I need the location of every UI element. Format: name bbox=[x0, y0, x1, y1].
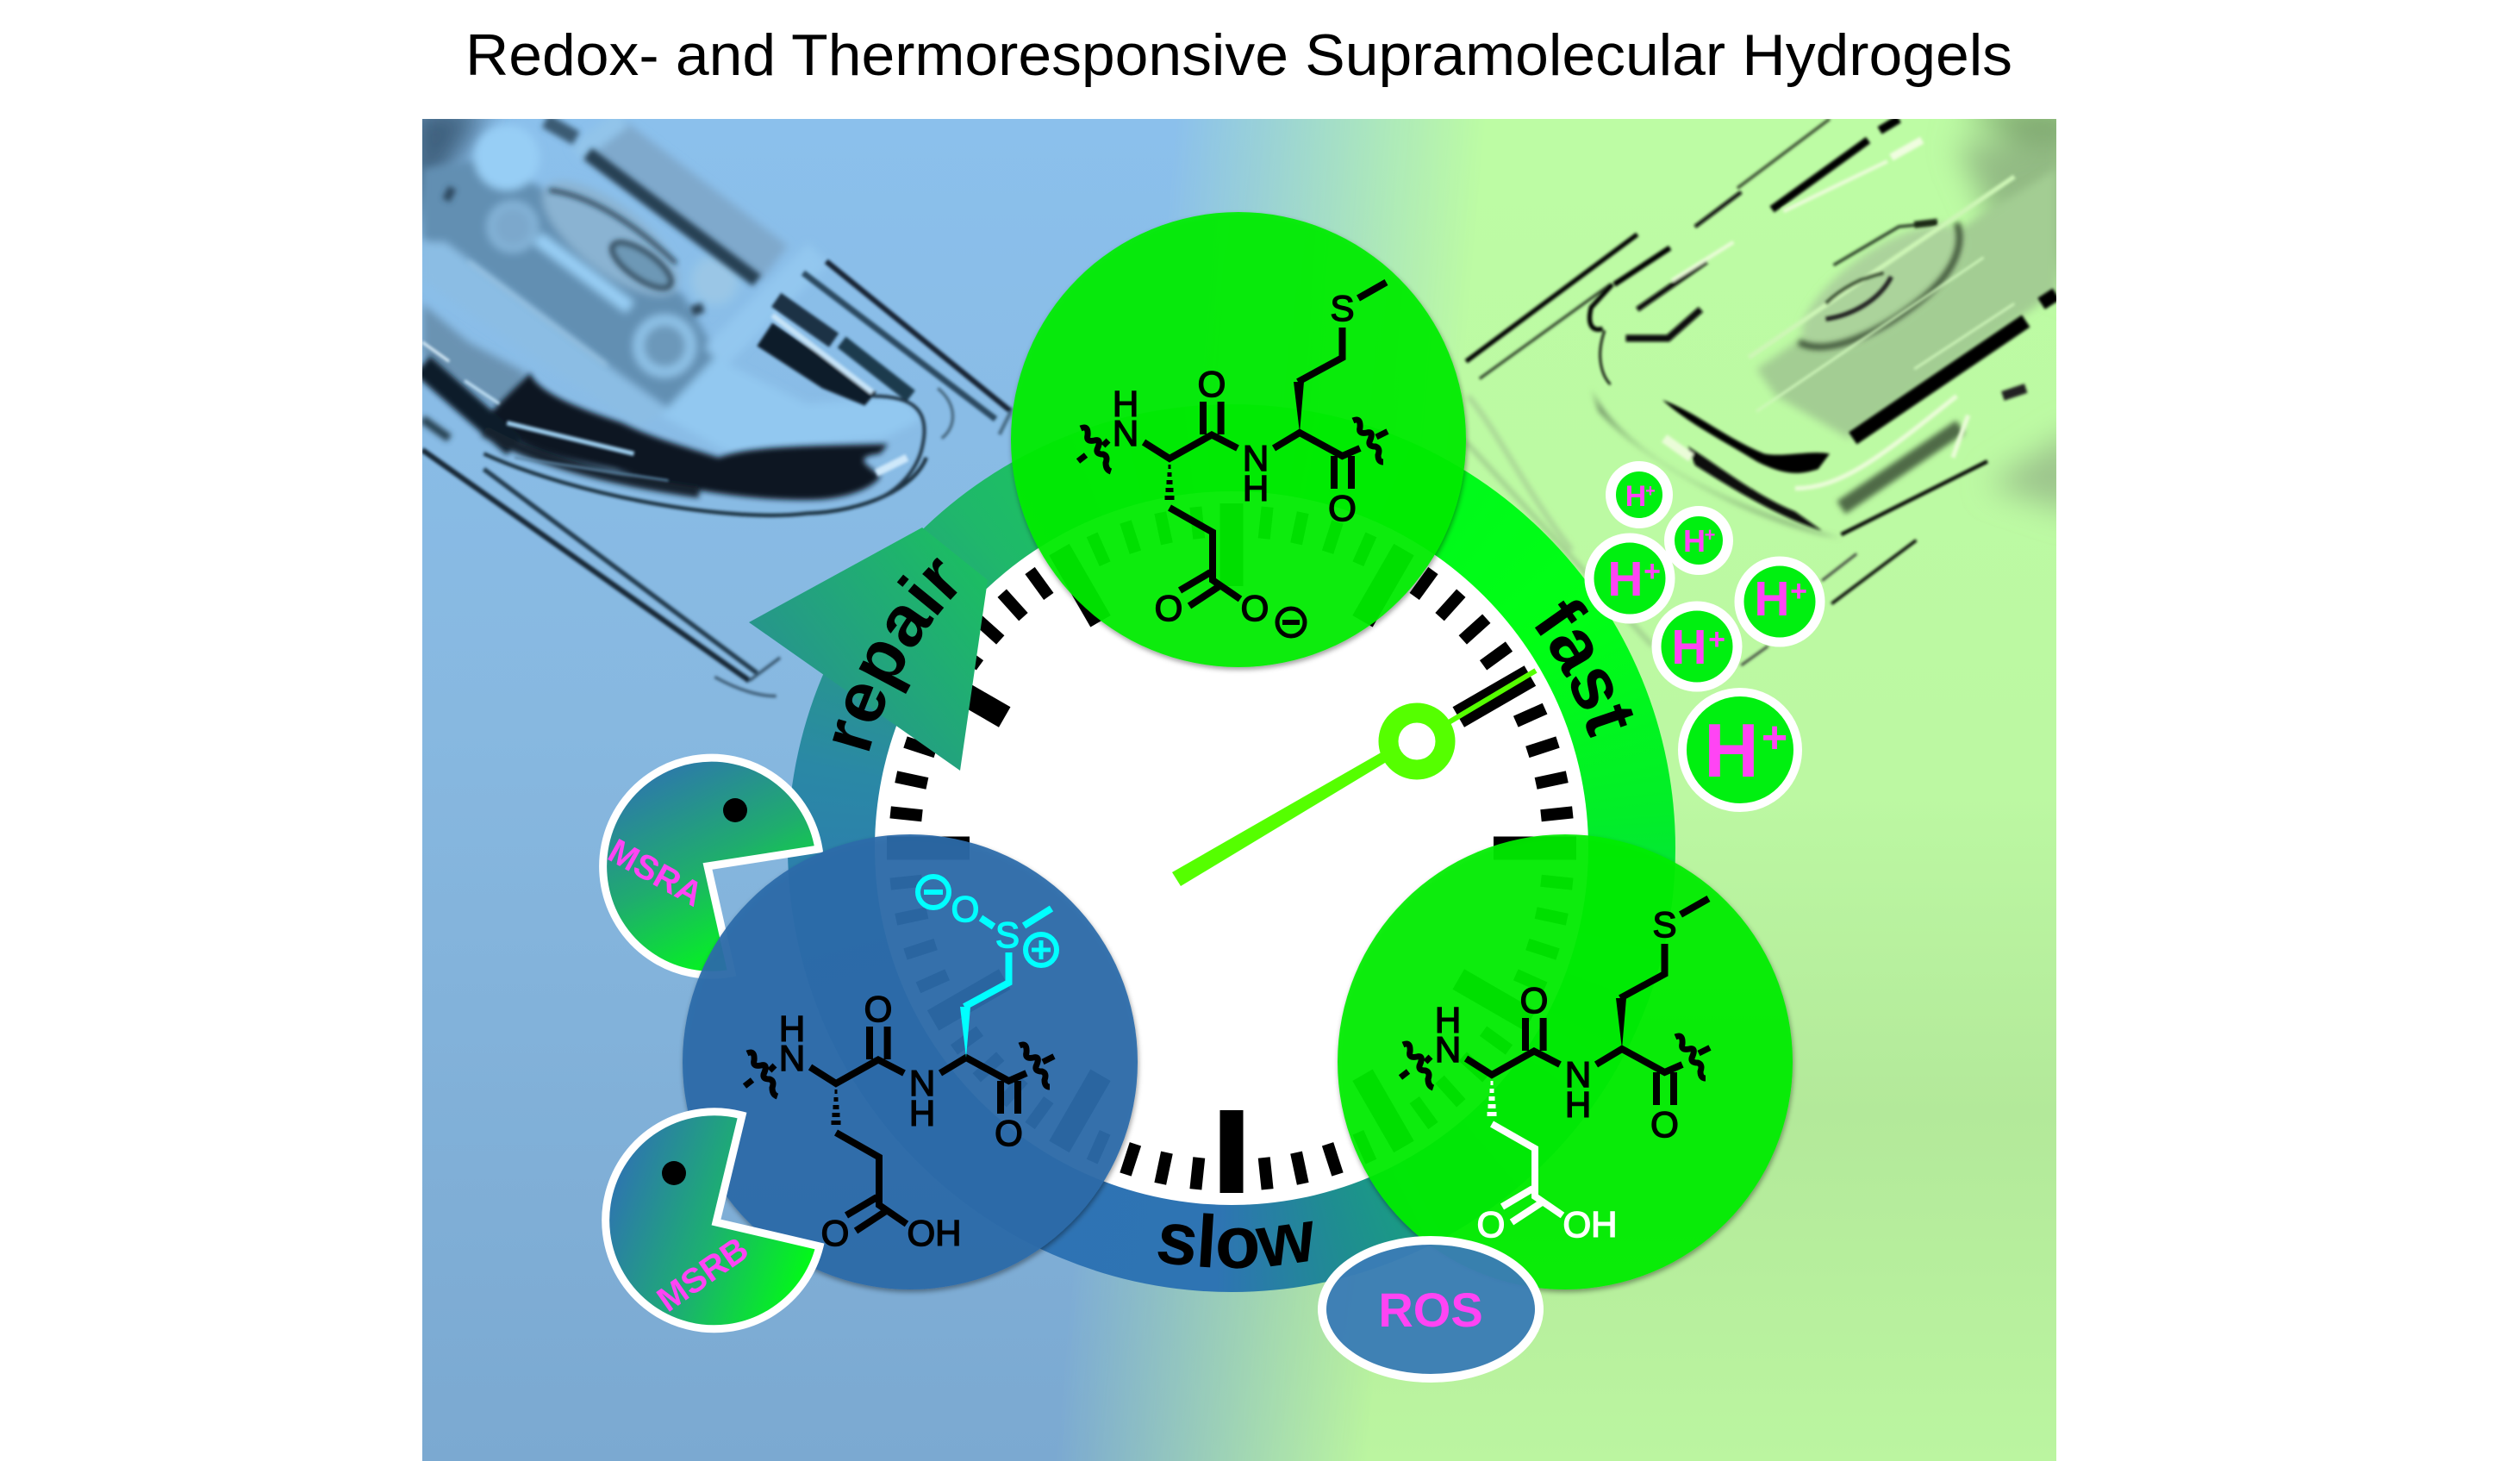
panel: methionine peptide circle (green, bottom right) bbox=[1338, 834, 1793, 1289]
molecule: carboxylate peptide: O bbox=[1241, 588, 1269, 628]
molecule: carboxylate peptide: N bbox=[1113, 413, 1138, 453]
molecule: sulfoxide peptide: H bbox=[909, 1093, 935, 1133]
cyan sulfoxide side chain: S bbox=[995, 915, 1020, 955]
molecule: carboxylate peptide bbox=[1078, 283, 1388, 636]
molecule: sulfoxide peptide: O bbox=[864, 989, 892, 1029]
enzyme: MSRB pacman: MSRB bbox=[651, 1230, 755, 1320]
molecule: peptide with protonated acid in white: S bbox=[1652, 904, 1677, 945]
ring label: repair: repair bbox=[833, 558, 957, 752]
molecule: peptide with protonated acid in white: H bbox=[1435, 1000, 1461, 1040]
proton bubbles bbox=[1589, 466, 1820, 808]
molecule: peptide with protonated acid in white: N bbox=[1435, 1029, 1461, 1070]
molecule: peptide with protonated acid in white: H bbox=[1565, 1084, 1591, 1125]
reactive oxygen species bubble bbox=[1322, 1240, 1539, 1378]
molecule: carboxylate peptide: N bbox=[1243, 438, 1269, 478]
photo: green tinted vial bbox=[1466, 103, 2080, 665]
proton bubble 4: H bbox=[1754, 571, 1790, 627]
molecule: carboxylate peptide: H bbox=[1243, 468, 1269, 509]
proton bubble 2 bbox=[1669, 511, 1728, 570]
molecule: sulfoxide peptide: O bbox=[995, 1113, 1023, 1153]
molecule: peptide with protonated acid in white: O bbox=[1520, 980, 1548, 1021]
clock face bbox=[875, 491, 1588, 1205]
background with photographs of hydrogel vials bbox=[422, 119, 2056, 1461]
panel: methionine glutamic acid peptide circle (green, top) bbox=[1011, 212, 1466, 667]
title: Redox- and Thermoresponsive Supramolecular Hydrogels bbox=[465, 22, 2012, 88]
reactive oxygen species bubble: ROS bbox=[1378, 1283, 1483, 1337]
molecule: carboxylate peptide: H bbox=[1113, 384, 1138, 424]
proton bubble 1: + bbox=[1645, 482, 1656, 501]
molecule: sulfoxide peptide bbox=[745, 877, 1057, 1253]
molecule: sulfoxide peptide: H bbox=[779, 1008, 805, 1049]
proton bubble 2: + bbox=[1705, 524, 1715, 546]
molecule: peptide with protonated acid in white: OH bbox=[1563, 1204, 1617, 1245]
proton bubble 6: H bbox=[1704, 708, 1759, 793]
proton bubble 1 bbox=[1611, 466, 1668, 523]
proton bubble 5 bbox=[1656, 606, 1737, 687]
enzyme: MSRB pacman bbox=[606, 1112, 820, 1329]
clock tick marks bbox=[860, 477, 1603, 1220]
molecule: peptide with protonated acid in white: O bbox=[1650, 1104, 1679, 1145]
molecule: sulfoxide peptide: OH bbox=[907, 1213, 962, 1253]
ring label: fast: fast bbox=[1535, 600, 1634, 738]
cyan sulfoxide side chain bbox=[918, 877, 1057, 1058]
proton bubble 6 bbox=[1682, 692, 1798, 808]
panel: oxidised methionine peptide circle (blue) bbox=[683, 834, 1138, 1289]
proton bubble 3 bbox=[1589, 538, 1670, 619]
proton bubble 3: + bbox=[1644, 555, 1661, 588]
molecule: sulfoxide peptide: N bbox=[779, 1038, 805, 1078]
molecule: peptide with protonated acid in white: N bbox=[1565, 1054, 1591, 1095]
photo: blue tinted vial bbox=[407, 103, 1011, 696]
enzyme: MSRA pacman bbox=[602, 758, 819, 975]
molecule: sulfoxide peptide: N bbox=[909, 1063, 935, 1103]
molecule: sulfoxide peptide: O bbox=[821, 1213, 849, 1253]
molecule: peptide with protonated acid in white bbox=[1400, 898, 1710, 1245]
proton bubble 2: H bbox=[1683, 523, 1706, 559]
molecule: peptide with protonated acid in white: O bbox=[1477, 1204, 1505, 1245]
proton bubble 1: H bbox=[1625, 480, 1646, 513]
proton bubble 4 bbox=[1739, 561, 1820, 642]
molecule: carboxylate peptide: O bbox=[1155, 588, 1182, 628]
molecule: carboxylate peptide: S bbox=[1330, 288, 1355, 328]
enzyme: MSRA pacman: MSRA bbox=[602, 832, 709, 915]
proton bubble 5: + bbox=[1708, 623, 1725, 656]
cyan sulfoxide side chain: O bbox=[951, 889, 979, 929]
proton bubble 4: + bbox=[1790, 575, 1807, 608]
background gradient bbox=[422, 119, 2056, 1461]
clock needle and hub bbox=[1172, 671, 1536, 886]
molecule: carboxylate peptide: O bbox=[1198, 364, 1226, 404]
proton bubble 5: H bbox=[1671, 620, 1707, 675]
ring label: slow: slow bbox=[1157, 1213, 1313, 1269]
proton bubble 6: + bbox=[1762, 713, 1787, 763]
arrow head: repair bbox=[749, 528, 988, 771]
clock dial outer ring with gradient from blue to green bbox=[788, 404, 1675, 1292]
proton bubble 3: H bbox=[1607, 552, 1644, 607]
molecule: carboxylate peptide: O bbox=[1328, 488, 1357, 528]
